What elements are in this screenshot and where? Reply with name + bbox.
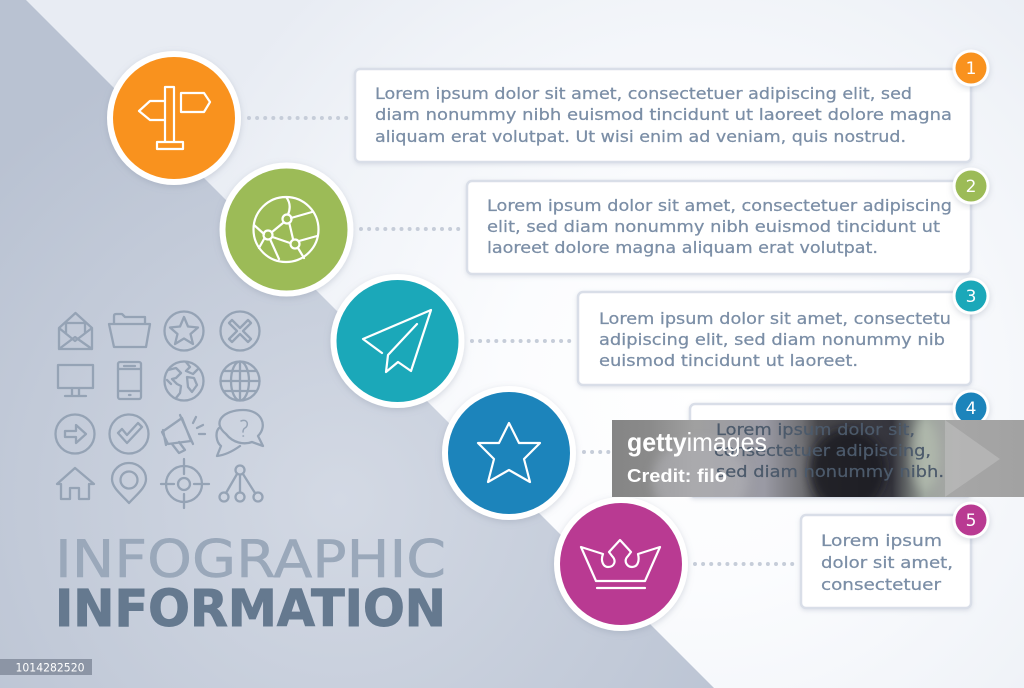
connector dots [249,118,793,564]
icon: network globe [254,197,318,262]
icon: target [161,459,209,508]
badge 2: 2 [966,177,976,197]
box 4 text seen through watermark: Lorem ipsum dolor sit, [716,420,915,439]
icon: smartphone [118,362,141,399]
panel: text box 2: Lorem ipsum dolor sit amet, consectetuer adipiscing [487,196,952,215]
background: dark diagonal left panel [0,0,714,688]
badge 5: 5 [966,511,976,531]
icon: network tree [220,466,262,502]
icon grid [56,312,263,508]
icon: megaphone [162,415,205,453]
watermark logo: gettyimages [627,427,767,457]
badge 3 [952,278,990,314]
icon: house [57,468,94,499]
badge 3: 3 [966,287,976,307]
heading line: infographic: INFOGRAPHIC [55,530,446,590]
badge 1: 1 [966,59,976,79]
step 4 circle with star [442,386,576,520]
panel: text box 4 [690,404,971,497]
panel: text box 3: Lorem ipsum dolor sit amet, consectetu [599,309,951,328]
badge 5 [952,502,990,538]
icon: open envelope [59,313,92,349]
panel: text box 5 [801,515,971,608]
badge 4 [952,390,990,426]
box 4 text seen through watermark: consectetuer adipiscing, [714,441,931,460]
icon: map pin [112,463,146,503]
badge 1 [952,50,990,86]
badge 4: 4 [966,399,976,419]
icon: folder [109,314,150,347]
panel: text box 1: Lorem ipsum dolor sit amet, consectetuer adipiscing elit, sed [375,84,912,103]
badge 2 [952,168,990,204]
icon: signpost [139,87,210,149]
panel: text box 2: laoreet dolore magna aliquam erat volutpat. [487,238,878,257]
step 5 circle with crown [554,497,688,631]
panel: text box 3: euismod tincidunt ut laoreet. [599,351,858,370]
box 4 text seen through watermark [714,420,944,481]
panel: text box 5: consectetuer [821,575,941,594]
panel: text box 1: aliquam erat volutpat. Ut wisi enim ad veniam, quis nostrud. [375,127,906,146]
icon: wire globe [220,362,260,400]
icon: network nodes [264,214,300,248]
panel: text box 5: dolor sit amet, [821,553,953,572]
icon: earth globe [164,362,204,400]
step 3 circle with paper plane [330,274,464,408]
image id tag [0,659,92,675]
panel: text box 2 [467,181,971,274]
icon: question speech bubbles [217,410,263,456]
icon: crown [581,540,660,588]
panel: text box 3: adipiscing elit, sed diam nonummy nib [599,330,945,349]
watermark triangle [945,420,1000,497]
icon: cross in circle [220,312,260,350]
icon: star [478,423,540,482]
icon: monitor [58,365,93,396]
icon: star in circle [164,312,204,350]
heading line: information: INFORMATION [55,580,446,639]
panel: text box 1: diam nonummy nibh euismod tincidunt ut laoreet dolore magna [375,105,952,124]
icon: check in circle [110,414,148,454]
title [55,530,446,639]
step 2 circle with network globe [220,162,354,296]
icon: arrow in circle [56,414,94,454]
watermark credit: Credit: filo [627,466,727,486]
watermark blobs [650,420,939,497]
panel: text box 3 [578,292,971,385]
icon: paper plane [363,310,431,372]
image id tag: 1014282520 [16,660,84,674]
panel: text box 5: Lorem ipsum [821,531,942,550]
panel: text box 1 [355,69,971,162]
watermark band [612,420,1024,497]
step 1 circle with signpost [107,51,241,185]
panel: text box 2: elit, sed diam nonummy nibh euismod tincidunt ut [487,217,940,236]
box 4 text seen through watermark: sed diam nonummy nibh. [716,462,944,481]
